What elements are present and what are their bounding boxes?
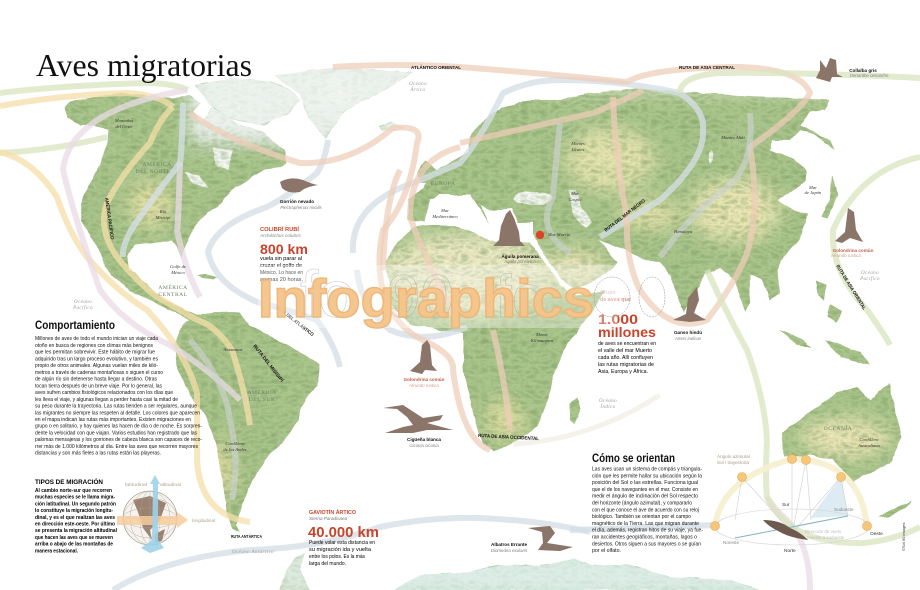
geographic labels: Cordillera: [225, 441, 245, 446]
text block: tipos de migración: TIPOS DE MIGRACIÓN: [35, 477, 103, 486]
route labels: RUTA DEL MISISIPÍ: [251, 342, 286, 384]
sun compass diagram: Noreste: [723, 540, 740, 545]
sun compass diagram: Ángulo azimutal: [717, 453, 750, 459]
callout: colibrí rubí: México. Lo hace en: [260, 270, 303, 276]
text block: tipos de migración: ción latitudinal. Un segundo patrón: [35, 501, 116, 507]
geographic labels: Montes Altái: [720, 135, 745, 140]
route labels: [103, 64, 867, 540]
route labels: RUTA DE ASIA OCCIDENTAL: [478, 433, 539, 442]
bird: gorrión nevado: Plectrophenax nivalis: [280, 205, 323, 210]
geographic labels: OCEANÍA: [824, 424, 852, 432]
text block: cómo se orientan: desiertos. Otros siguen a sus mayores o se guían: [592, 541, 701, 547]
callout: 1.000 millones: cada año. Allí confluyen: [598, 355, 653, 361]
geographic labels: Pacífico: [859, 277, 880, 282]
marker: Mar Muerto: Mar Muerto: [547, 232, 571, 237]
text block: tipos de migración: [35, 477, 118, 554]
text block: cómo se orientan: posición del Sol o las estrellas. Funciona igual: [592, 480, 698, 486]
text block: cómo se orientan: medir el ángulo de inclinación del Sol respecto: [592, 494, 698, 500]
route labels: RUTA DE ASIA CENTRAL: [679, 65, 735, 71]
geographic labels: Pacífico: [72, 306, 93, 311]
geographic labels: Océano: [599, 399, 617, 404]
text block: comportamiento: otoño en busca de regiones con climas más benignos: [35, 343, 153, 349]
callout: gaviotín ártico: GAVIOTÍN ÁRTICO: [309, 508, 356, 516]
title: Aves migratorias: [36, 47, 252, 83]
geographic labels: Río: [159, 209, 167, 214]
callout: colibrí rubí: COLIBRÍ RUBÍ: [260, 225, 299, 233]
sun compass diagram: Dirección de vuelo: [805, 529, 842, 534]
callout: colibrí rubí: 800 km: [260, 241, 308, 257]
sun compass diagram: Sol / trayectoria: [717, 460, 749, 465]
geographic labels: Océano: [409, 82, 427, 87]
callout: colibrí rubí: [259, 225, 308, 283]
callout: 1.000 millones: 1.000: [598, 311, 638, 327]
bird: collalba gris: Oenanthe oenanthe: [850, 73, 889, 78]
geographic labels: Australiana: [857, 443, 881, 448]
geographic labels: CENTRAL: [158, 292, 188, 298]
text block: tipos de migración: que hacen las aves que se mueven: [35, 535, 113, 541]
text block: cómo se orientan: con el que conoce el ave de acuerdo con su reloj: [592, 507, 699, 513]
callout: colibrí rubí: Archilochus colubris: [259, 233, 302, 238]
pale ice overlay on polar land: [195, 60, 780, 590]
geographic labels: DEL SUR: [249, 397, 275, 403]
geographic labels: Kilimanjaro: [530, 338, 554, 343]
route labels: AMÉRICA PACÍFICO: [103, 197, 117, 240]
geographic labels: DEL NORTE: [136, 169, 171, 175]
bird: golondrina común (África): Golondrina común: [404, 377, 445, 382]
route labels: RUTA ANTÁRTICA: [231, 533, 262, 540]
callout: gaviotín ártico: su migración ida y vuelta: [309, 547, 371, 553]
text block: cómo se orientan: biológico. También se orientan por el campo: [592, 514, 691, 520]
text block: comportamiento: en el mapa indican las rutas más importantes. Existen migraciones en: [35, 417, 191, 423]
text block: comportamiento: dente la velocidad con que viajan. Varios estudios han registrado que las: [35, 430, 197, 436]
text block: comportamiento: [35, 318, 202, 457]
geographic labels: [72, 82, 881, 555]
bird: gorrión nevado: Gorrión nevado: [280, 199, 314, 204]
geographic labels: Amazonas: [223, 347, 243, 352]
geographic labels: Himalaya: [673, 229, 693, 234]
geographic labels: del Oeste: [115, 124, 133, 129]
geographic labels: Monte: [535, 332, 548, 337]
text block: tipos de migración: muchas especies se le llama migra-: [35, 495, 115, 501]
text block: cómo se orientan: que el de los navegantes en el mar. Consiste en: [592, 487, 698, 493]
text block: tipos de migración: se presenta la migración altitudinal: [35, 528, 118, 534]
geographic labels: Urales: [572, 147, 584, 152]
callout: gaviotín ártico: larga del mundo.: [309, 561, 346, 567]
route labels: RUTA DEL MAR NEGRO: [604, 198, 647, 234]
geographic labels: Mar: [570, 191, 579, 196]
geographic labels: Océano: [861, 271, 879, 276]
text block: comportamiento: Comportamiento: [35, 318, 115, 332]
geographic labels: Cordillera: [859, 437, 879, 442]
text block: comportamiento: grupo o en solitario, y hay quienes las hacen de día o de noche. Es sorpren-: [35, 424, 202, 430]
bird: golondrina común (Asia): Golondrina común: [833, 248, 874, 253]
text block: comportamiento: tocan tierra después de un breve viaje. Por lo general, las: [35, 383, 162, 389]
callout: gaviotín ártico: [308, 508, 379, 567]
text block: comportamiento: rrer más de 1.000 kilómetros al día. Entre las aves que recorren mayores: [35, 444, 198, 450]
callout: 1.000 millones: de aves se encuentran en: [598, 341, 656, 347]
geographic labels: de Japón: [805, 190, 822, 195]
sun compass diagram: [710, 453, 883, 554]
geographic labels: Mar: [808, 185, 817, 190]
text block: comportamiento: su peso durante la trayectoria. Las rutas tienden a ser regulares, aunque: [35, 404, 197, 410]
bird: gorrión nevado: [280, 178, 323, 210]
sun compass diagram: Oeste: [870, 531, 883, 537]
geographic labels: Ártico: [410, 87, 426, 93]
globe diagram: migration types: longitudinal: [192, 518, 215, 524]
text block: tipos de migración: arriba o abajo de las montañas de: [35, 542, 113, 548]
text block: tipos de migración: manera estacional.: [35, 548, 79, 554]
text block: comportamiento: distancias y son más fieles a las rutas están las playeras.: [35, 451, 161, 457]
geographic labels: AMÉRICA: [247, 388, 277, 396]
bird: ganso hindú: Anser indicus: [674, 336, 702, 341]
callout: colibrí rubí: cruzar el golfo de: [260, 263, 302, 269]
text block: tipos de migración: en dirección este-oeste. Por último: [35, 522, 115, 528]
geographic labels: Caspio: [568, 197, 582, 202]
route labels: RUTA DEL ATLÁNTICO: [275, 304, 316, 338]
bird: golondrina común (África): Hirundo rustica: [409, 383, 439, 388]
callout: 1.000 millones: Asia, Europa y África.: [598, 368, 648, 375]
watermark: Infographics90: 90: [387, 263, 454, 330]
text block: comportamiento: les lleva el viaje, y algunas llegan a perder hasta casi la mitad de: [35, 397, 178, 403]
geographic labels: Mar: [440, 208, 449, 213]
bird: cigüeña blanca: [383, 405, 453, 448]
callout: gaviotín ártico: entre los polos. Es la más: [309, 554, 365, 560]
bird: albatros errante: Albatros Errante: [491, 542, 527, 547]
text block: comportamiento: metros a través de cadenas montañosas o siguen el curso: [35, 370, 163, 376]
text block: comportamiento: de algún río sin detenerse hasta llegar a destino. Otras: [35, 377, 157, 383]
bird: ganso hindú: [673, 287, 706, 341]
text block: cómo se orientan: por el olfato.: [592, 548, 621, 554]
bird: collalba gris: Collalba gris: [849, 68, 877, 73]
bird: águila pomerana: Aquila pomarina: [503, 259, 536, 264]
sun compass diagram: Sudoeste: [834, 507, 854, 512]
callout: gaviotín ártico: 40.000 km: [308, 525, 379, 541]
geographic labels: Índico: [599, 404, 616, 410]
geographic labels: México: [170, 270, 185, 275]
geographic labels: Montes: [570, 141, 585, 146]
text block: cómo se orientan: el día, además, registran hitos de su viaje, ya fue-: [592, 528, 703, 534]
text block: comportamiento: aves sufren cambios fisiológicos relacionados con los días que: [35, 390, 173, 396]
bird: golondrina común (Asia): [831, 208, 874, 258]
text block: comportamiento: propio de otros animales. Algunas vuelan miles de kiló-: [35, 363, 158, 369]
text block: cómo se orientan: [592, 453, 703, 554]
callout: 1.000 millones: Grupo: [600, 290, 616, 296]
watermark: Infographics90: fo: [300, 257, 355, 331]
route labels: RUTA DE ASIA ORIENTAL: [834, 264, 867, 311]
callout: gaviotín ártico: Puede volar esta distancia en: [309, 540, 375, 546]
geographic labels: Golfo de: [170, 264, 186, 269]
callout: 1.000 millones: millones: [598, 324, 656, 340]
route labels: ATLÁNTICO ORIENTAL: [411, 64, 461, 71]
geographic labels: Misisipí: [155, 215, 171, 220]
bird: águila pomerana: [493, 210, 539, 264]
watermark: Infographics90: [258, 257, 665, 331]
bird: albatros errante: [491, 526, 573, 553]
text block: cómo se orientan: del horizonte (ángulo azimutal), y compararlo: [592, 500, 692, 506]
bird: golondrina común (Asia): Hirundo rustica: [831, 253, 861, 258]
text block: tipos de migración: dinal, y es el que realizan las aves: [35, 515, 115, 521]
watermark: Infographics90: fo: [495, 263, 545, 330]
geographic labels: Mediterráneo: [431, 214, 458, 219]
geographic labels: AMÉRICA: [158, 283, 188, 291]
bird: cigüeña blanca: Ciconia ciconia: [409, 443, 439, 448]
marker: Mar Muerto: [536, 231, 600, 239]
globe diagram: migration types: altitudinal: [160, 482, 181, 488]
globe diagram: migration types: [117, 475, 215, 553]
text block: cómo se orientan: ran accidentes geográficos, montañas, lagos o: [592, 534, 697, 540]
text block: comportamiento: adquirido tras un largo proceso evolutivo, y también es: [35, 356, 158, 362]
text block: comportamiento: Millones de aves de todo el mundo inician un viaje cada: [35, 336, 158, 342]
bird: ganso hindú: Ganso hindú: [674, 330, 702, 335]
text block: cómo se orientan: Las aves usan un sistema de compás y triangula-: [592, 466, 702, 472]
suns: [710, 454, 872, 530]
geographic labels: AMÉRICA: [142, 160, 172, 168]
text block: tipos de migración: Al cambio norte-sur que recorren: [35, 488, 112, 494]
geographic labels: EUROPA: [431, 181, 455, 187]
callout: 1.000 millones: el valle del mar Muerto: [598, 348, 652, 354]
bird: albatros errante: Diomedea exulans: [491, 548, 528, 553]
text block: comportamiento: las migrantes no siempre las respeten al detalle. Los colores que aparecen: [35, 410, 200, 416]
text block: cómo se orientan: Cómo se orientan: [592, 453, 675, 465]
credit: ©Sol 90 Images: [901, 522, 906, 551]
callout: 1.000 millones: las rutas migratorias de: [598, 362, 654, 368]
callout: 1.000 millones: [598, 290, 656, 375]
bird: golondrina común (África): [404, 340, 445, 388]
watermark: Infographics90: Infographics: [258, 269, 594, 329]
sun compass diagram: noreste a sudoeste: [807, 535, 845, 540]
bird: águila pomerana: Águila pomerana: [501, 253, 539, 259]
text block: comportamiento: que les permitan sobrevivir. Este hábito de migrar fue: [35, 350, 155, 356]
geographic labels: Montañas: [114, 118, 133, 123]
bird: collalba gris: [816, 58, 889, 82]
sun compass diagram: Norte: [784, 548, 796, 554]
geographic labels: Océano: [74, 300, 92, 305]
callout: 1.000 millones: de aves que: [600, 297, 631, 303]
text block: cómo se orientan: ción que les permite hallar su ubicación según la: [592, 473, 702, 479]
text block: tipos de migración: lo constituye la migración longitu-: [35, 508, 113, 514]
geographic labels: de los Andes: [223, 447, 247, 452]
sun compass diagram: Sur: [782, 502, 790, 508]
text block: comportamiento: palomas mensajeras y los gorriones de cabeza blanca son capaces de reco-: [35, 437, 202, 443]
globe diagram: migration types: latitudinal: [125, 482, 147, 488]
callout: colibrí rubí: vuela sin parar al: [260, 256, 302, 262]
geographic labels: Océano Antártico: [232, 550, 274, 555]
callout: gaviotín ártico: Sterna Paradisaea: [309, 516, 347, 521]
bird: cigüeña blanca: Cigüeña blanca: [407, 437, 441, 442]
text block: cómo se orientan: magnético de la Tierra. Las que migran durante: [592, 521, 699, 527]
callout: colibrí rubí: apenas 20 horas.: [260, 277, 303, 283]
